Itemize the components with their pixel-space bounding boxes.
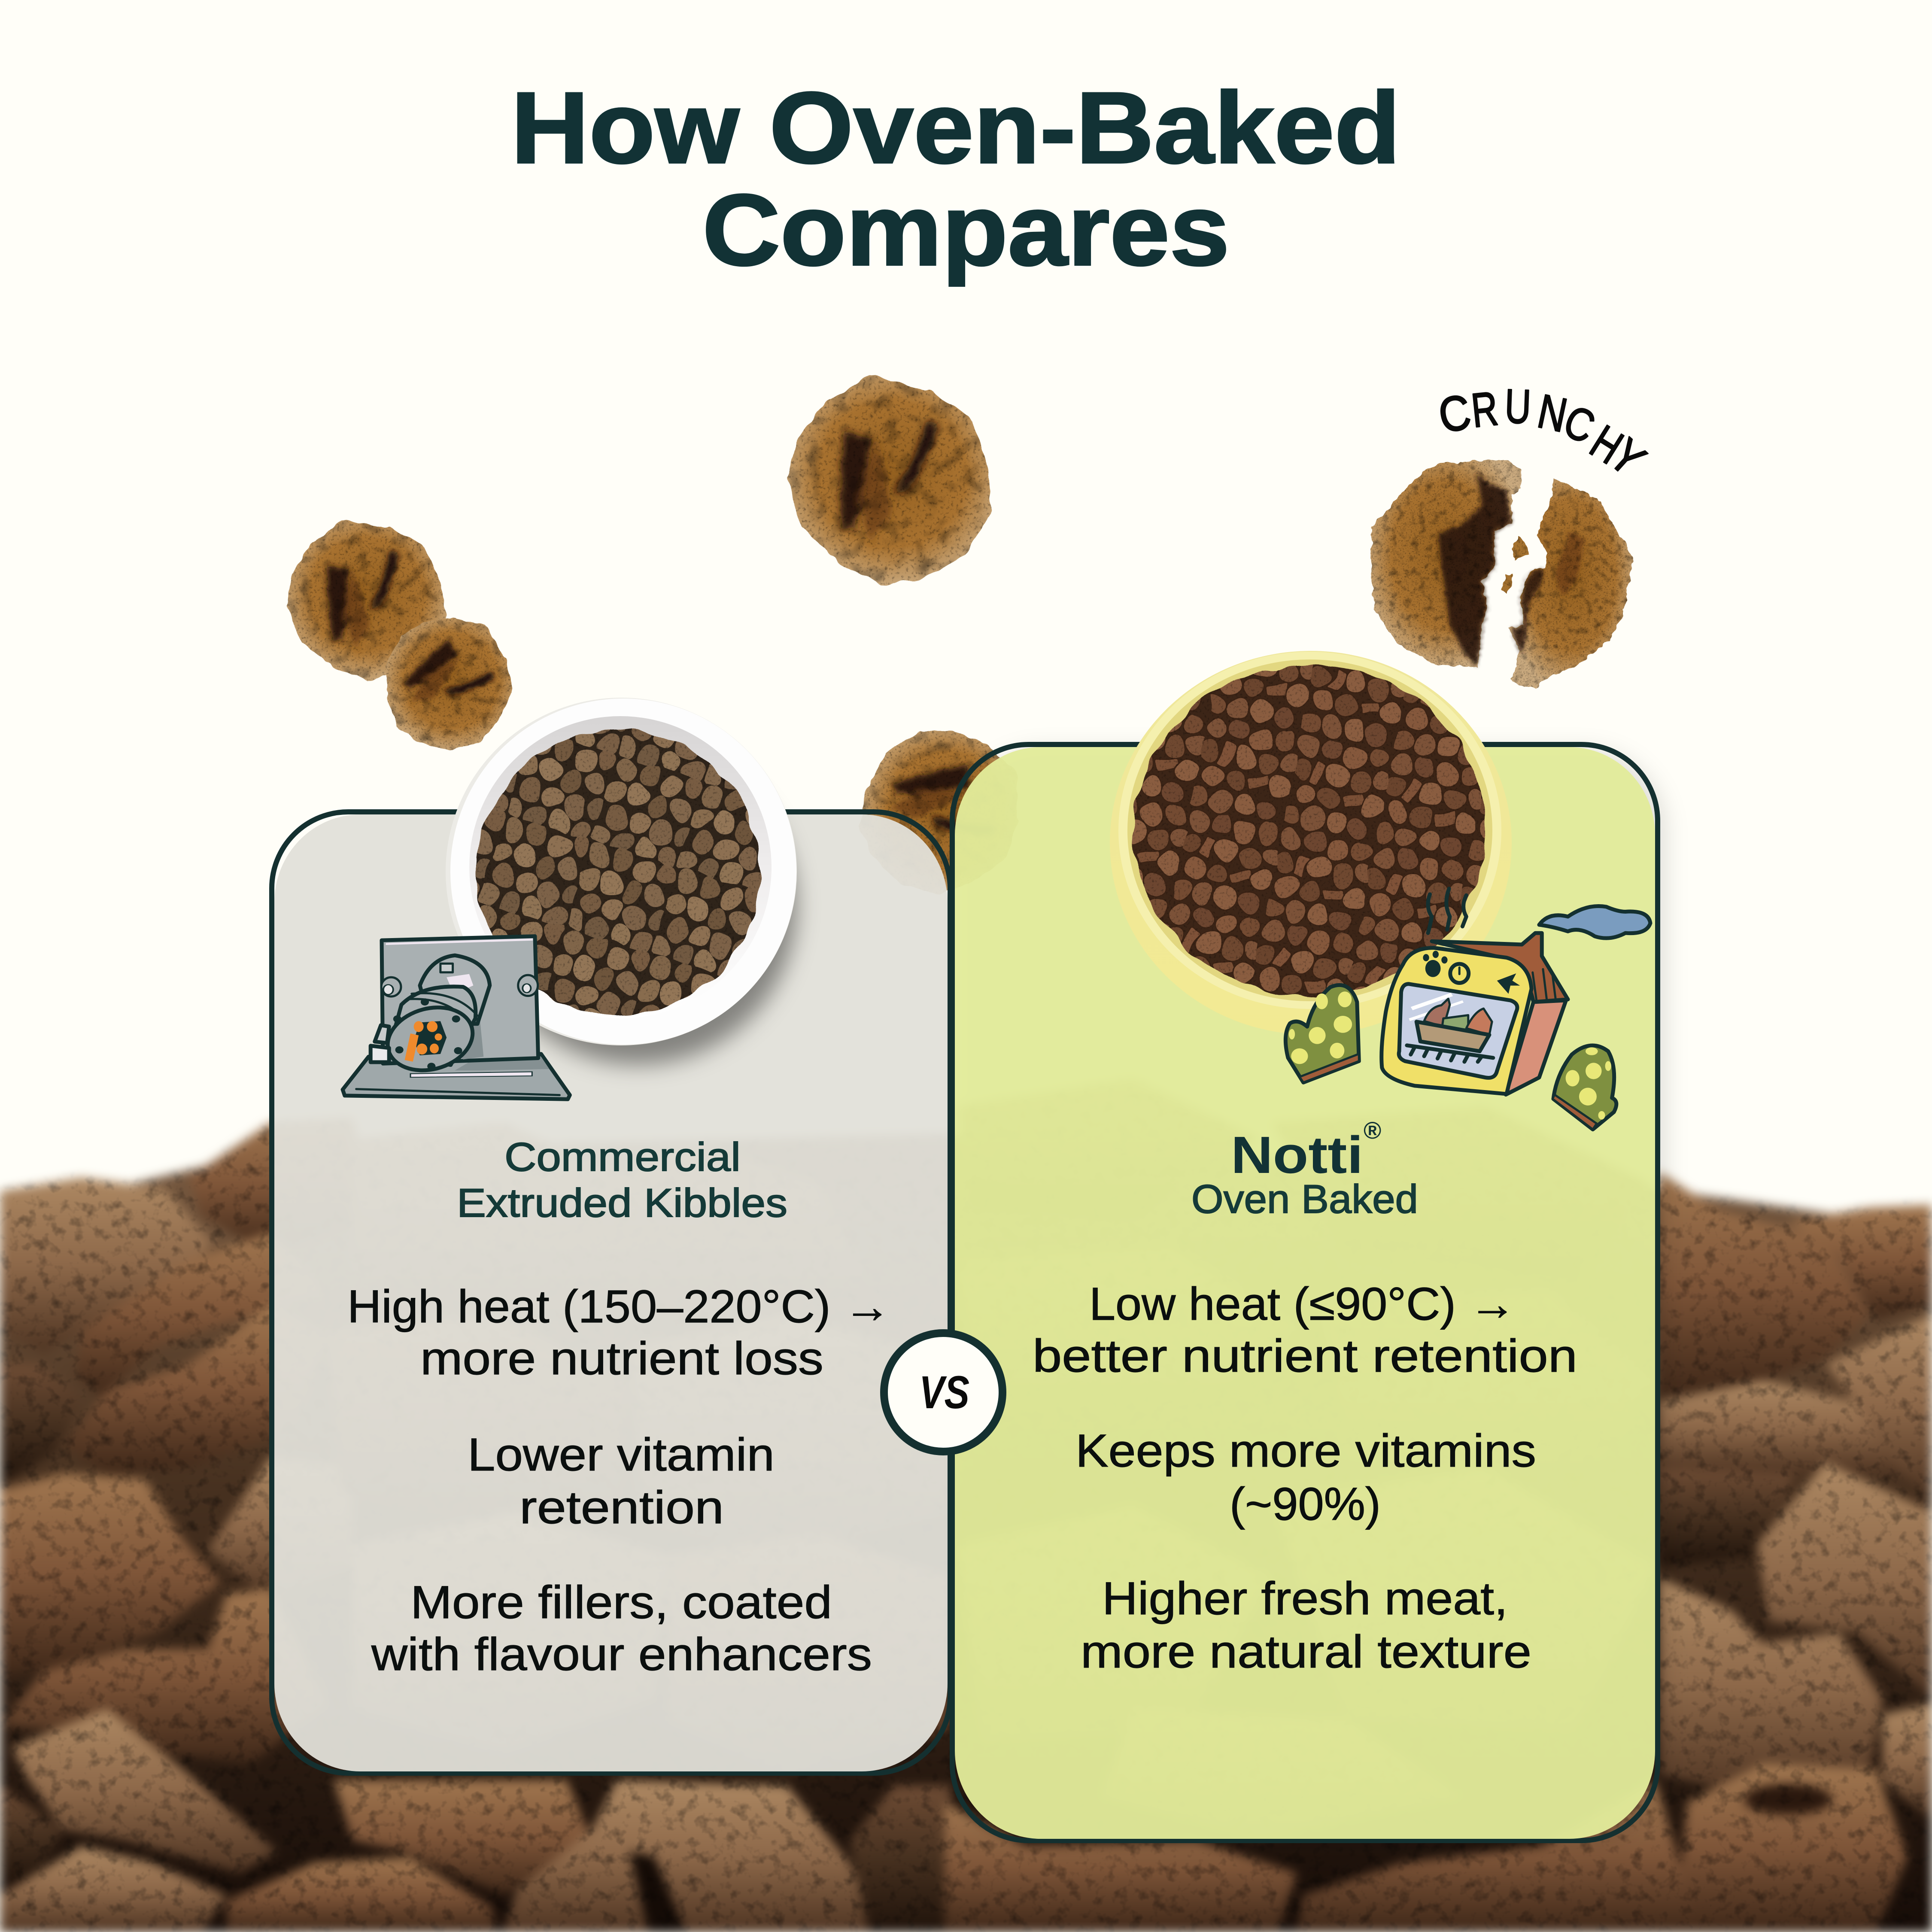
heading: commercial extruded kibbles xyxy=(457,1134,787,1225)
text block: commercial kibble points: High heat (150–220°C) → xyxy=(347,1280,891,1332)
vs badge xyxy=(884,1333,1002,1452)
floating kibble: left back xyxy=(284,519,450,683)
panel: notti oven baked xyxy=(952,744,1666,1841)
text block: notti points: Higher fresh meat, xyxy=(1102,1572,1508,1624)
title: Compares xyxy=(702,173,1230,287)
yellow bowl of oven baked kibble xyxy=(1110,651,1512,1035)
text block: notti points: better nutrient retention xyxy=(1033,1330,1577,1382)
logo: notti xyxy=(1231,1117,1381,1184)
text block: commercial kibble points: Lower vitamin xyxy=(468,1428,775,1480)
title xyxy=(511,71,1400,287)
text block: notti points xyxy=(1033,1278,1577,1677)
logo: notti: ® xyxy=(1364,1117,1381,1144)
text block: notti points: Keeps more vitamins xyxy=(1075,1425,1536,1476)
icon: extruder machine xyxy=(343,936,570,1099)
icon: smoke cloud xyxy=(1539,906,1650,938)
text: CRUNCHY: U xyxy=(1504,379,1532,434)
heading: commercial extruded kibbles: Commercial xyxy=(504,1134,741,1179)
heading: oven baked: Oven Baked xyxy=(1191,1176,1418,1221)
icon: left oven mitt xyxy=(1285,985,1359,1082)
logo: notti: Notti xyxy=(1231,1126,1363,1184)
icon: steam xyxy=(1428,889,1466,933)
floating kibble: top centre xyxy=(774,366,1009,598)
text: CRUNCHY: R xyxy=(1469,381,1501,437)
icon: oven xyxy=(1382,933,1568,1095)
floating kibble: behind the cards xyxy=(847,719,1032,905)
text block: notti points: more natural texture xyxy=(1081,1625,1531,1677)
text: CRUNCHY: Y xyxy=(1599,428,1656,487)
icon: oven with mitts and smoke xyxy=(1285,889,1650,1130)
text: CRUNCHY: N xyxy=(1533,384,1572,442)
text: CRUNCHY: C xyxy=(1434,383,1475,443)
floating kibble: left front xyxy=(354,591,540,777)
broken crunchy kibble xyxy=(1370,460,1633,689)
text: CRUNCHY: H xyxy=(1582,415,1632,474)
text block: commercial kibble points xyxy=(347,1280,891,1680)
text block: commercial kibble points: retention xyxy=(519,1481,724,1533)
text: CRUNCHY xyxy=(1434,379,1656,487)
text block: notti points: Low heat (≤90°C) → xyxy=(1089,1278,1516,1330)
panel: commercial extruded kibbles xyxy=(272,812,950,1773)
text block: commercial kibble points: with flavour enhancers xyxy=(371,1628,872,1680)
icon: right oven mitt xyxy=(1552,1045,1616,1130)
background photo: pile of kibbles xyxy=(0,1079,1932,1932)
heading: commercial extruded kibbles: Extruded Kibbles xyxy=(457,1180,787,1225)
title: How Oven-Baked xyxy=(511,71,1400,185)
white bowl of extruded kibble xyxy=(446,698,797,1065)
vs badge: VS xyxy=(919,1366,969,1418)
text block: commercial kibble points: More fillers, coated xyxy=(410,1576,832,1628)
text: CRUNCHY: C xyxy=(1557,395,1602,453)
text block: commercial kibble points: more nutrient loss xyxy=(420,1332,823,1384)
text block: notti points: (~90%) xyxy=(1230,1478,1381,1530)
